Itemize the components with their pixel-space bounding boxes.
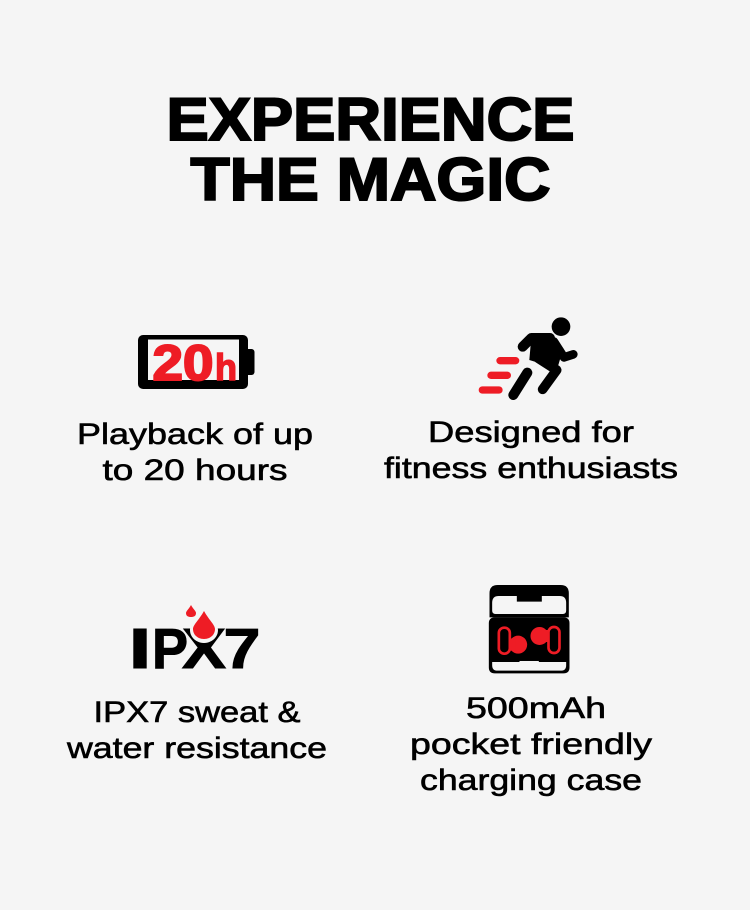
icon: battery 20h: 20 [152, 335, 214, 391]
icon: battery 20h: h [215, 347, 237, 388]
text: IPX7 resistance: water resistance [66, 732, 327, 765]
text: playback: to 20 hours [102, 454, 288, 487]
text: charging case: pocket friendly [410, 728, 652, 761]
text: playback: Playback of up [77, 418, 313, 451]
text: IPX7 resistance: IPX7 sweat & [94, 696, 300, 729]
icon: runner [482, 317, 573, 395]
icon: IPX7 with drops: X [182, 617, 226, 681]
text: IPX7 resistance [66, 696, 327, 765]
text: playback [77, 418, 313, 487]
icon: battery 20h [138, 335, 254, 391]
icon: IPX7 with drops: P [152, 617, 188, 681]
title: THE MAGIC [190, 146, 550, 213]
text: charging case [410, 692, 652, 797]
text: fitness [384, 416, 678, 485]
icon: charging case [489, 585, 569, 673]
text: fitness: Designed for [428, 416, 634, 449]
title: EXPERIENCE [166, 86, 574, 153]
text: charging case: 500mAh [466, 692, 606, 725]
icon: IPX7 with drops: I [128, 617, 152, 681]
title [166, 86, 574, 213]
text: fitness: fitness enthusiasts [384, 452, 678, 485]
icon: IPX7 with drops: 7 [224, 617, 260, 681]
text: charging case: charging case [420, 764, 642, 797]
icon: IPX7 with drops [128, 605, 260, 681]
